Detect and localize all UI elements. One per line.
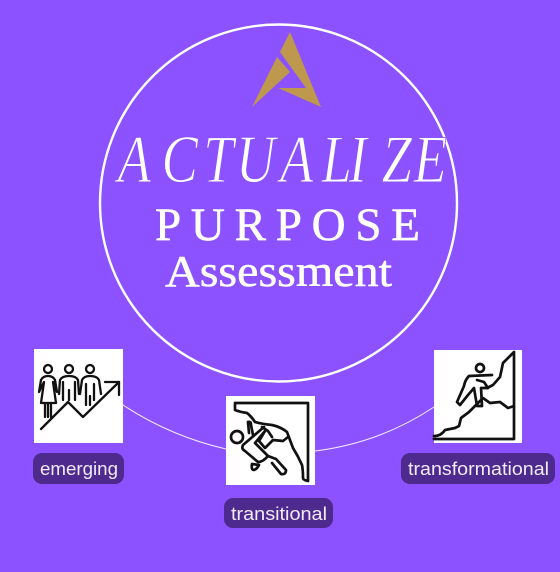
stage: transformational bbox=[401, 350, 555, 484]
main circle bbox=[100, 24, 457, 382]
stage: transitional bbox=[224, 396, 333, 528]
title: Actualize: ACTUALIZE bbox=[114, 122, 447, 197]
icon: climber on mountain bbox=[434, 350, 522, 443]
connecting arc between stages bbox=[123, 405, 434, 451]
label pill: transformational: transformational bbox=[408, 459, 549, 479]
heading: Purpose: PURPOSE bbox=[155, 199, 420, 251]
label pill: transformational bbox=[401, 453, 555, 484]
icon: three people with rising arrow bbox=[34, 349, 123, 443]
label pill: emerging: emerging bbox=[40, 459, 118, 479]
heading: Assessment: Assessment bbox=[165, 247, 392, 296]
icon: gold logo bbox=[252, 32, 321, 107]
stage: emerging bbox=[33, 349, 124, 484]
label pill: transitional: transitional bbox=[231, 504, 327, 524]
icon: figure wrestling on a cliff bbox=[226, 396, 315, 485]
